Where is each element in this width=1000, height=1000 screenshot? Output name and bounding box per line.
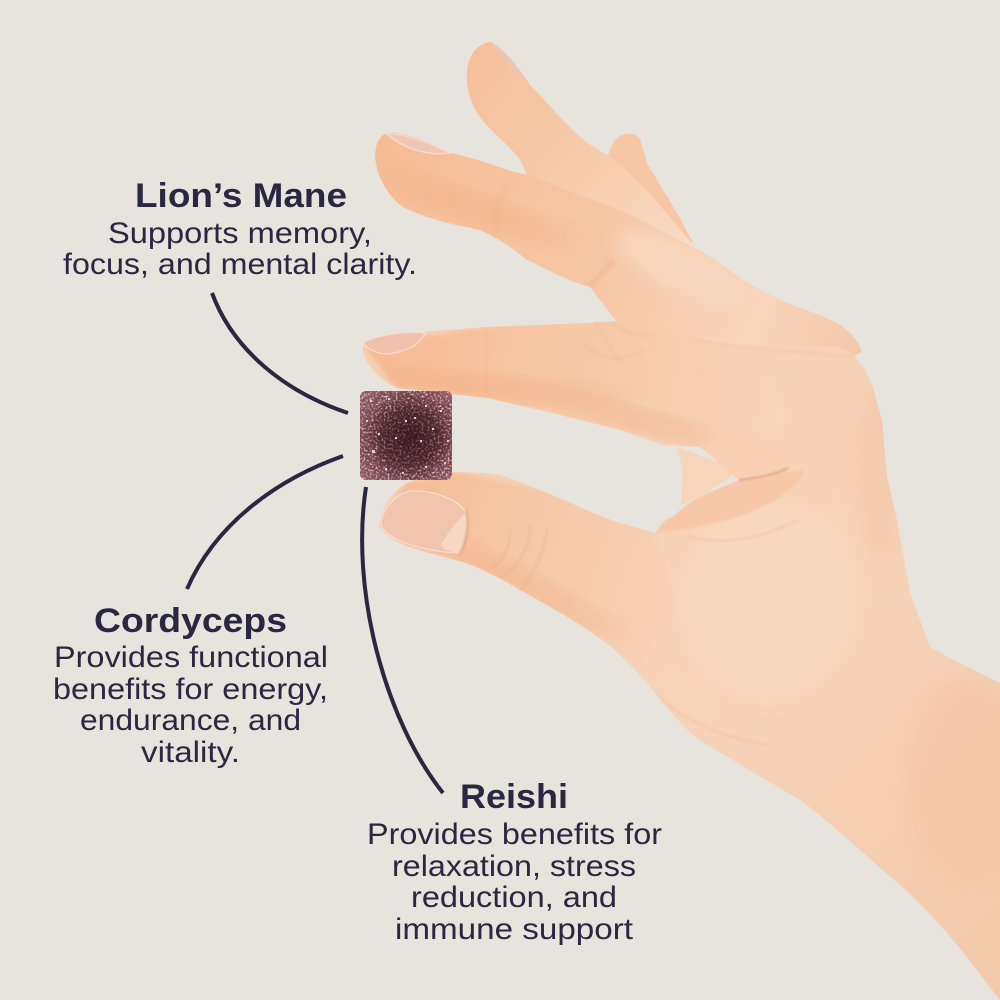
connector line: Cordyceps (187, 456, 343, 589)
heading: Reishi (460, 778, 568, 816)
description: relaxation, stress (392, 850, 636, 883)
wrist shading (910, 680, 1000, 880)
description (63, 217, 417, 281)
description: Provides functional (54, 641, 328, 674)
ring finger nail (491, 42, 530, 85)
gummy cube (360, 391, 452, 480)
description (53, 641, 328, 769)
web fold of thumb (655, 470, 805, 533)
middle finger nail (387, 134, 450, 154)
thumb nail (381, 491, 468, 555)
ring finger (467, 42, 693, 244)
description: reduction, and (411, 881, 617, 914)
description: Supports memory, (108, 217, 372, 250)
description: Provides benefits for (367, 818, 662, 851)
index finger nail (363, 332, 425, 354)
callout: Reishi (367, 778, 662, 946)
description (367, 818, 662, 946)
description: focus, and mental clarity. (63, 248, 417, 281)
callout: Lion's Mane (63, 177, 417, 281)
heading: Lion’s Mane (135, 177, 347, 215)
palm patch behind gap (677, 447, 740, 505)
connector line: Reishi (362, 487, 443, 793)
little finger behind (608, 134, 693, 243)
middle finger (375, 132, 862, 356)
description: vitality. (141, 736, 240, 769)
index finger shading (364, 321, 648, 427)
description: immune support (395, 913, 633, 946)
description: endurance, and (80, 704, 301, 737)
knuckle creases (585, 322, 652, 362)
heading: Cordyceps (94, 602, 287, 640)
thumb shading (380, 472, 642, 641)
hand holding gummy (363, 42, 1000, 1000)
connector line: Lion's Mane (212, 293, 348, 413)
callout: Cordyceps (53, 602, 328, 769)
main hand with index finger and thumb (363, 320, 1000, 1000)
description: benefits for energy, (53, 673, 328, 706)
